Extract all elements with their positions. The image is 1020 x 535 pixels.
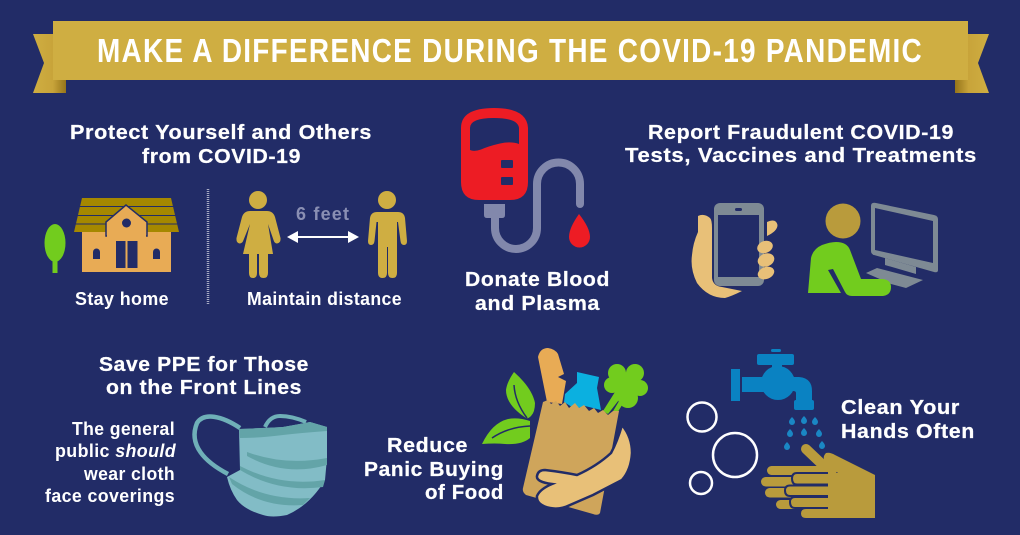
icon: house <box>74 198 179 272</box>
heading: reduce panic buying: Panic Buying <box>364 459 504 481</box>
heading: save ppe: on the Front Lines <box>106 377 302 399</box>
label: 6 feet: 6 feet <box>296 204 349 224</box>
icon: water drops <box>784 416 825 450</box>
text: cloth face coverings: The general <box>72 419 175 439</box>
icon: hand holding phone <box>692 203 778 298</box>
icon: tree <box>44 224 66 273</box>
heading: protect yourself: Protect Yourself and Others <box>70 122 372 144</box>
heading: clean your hands: Hands Often <box>841 421 975 443</box>
icon: washing hands <box>761 449 875 518</box>
heading: reduce panic buying: of Food <box>425 482 504 504</box>
text: cloth face coverings: wear cloth <box>83 464 175 484</box>
heading: protect yourself <box>70 122 372 168</box>
heading: donate blood: and Plasma <box>475 293 600 315</box>
leaf lower <box>482 418 530 444</box>
heading: reduce panic buying <box>364 435 504 504</box>
icon: faucet <box>731 349 814 410</box>
icon: grocery bag <box>482 348 648 515</box>
heading: save ppe <box>99 354 309 399</box>
leaf upper <box>506 372 535 418</box>
icon: person at computer <box>808 204 891 296</box>
arrow: distance <box>287 231 359 243</box>
title banner <box>33 21 989 93</box>
heading: report fraudulent <box>625 122 977 167</box>
heading: donate blood <box>465 269 610 315</box>
heading: report fraudulent: Tests, Vaccines and Treatments <box>625 145 977 167</box>
heading: reduce panic buying: Reduce <box>387 435 468 457</box>
arm <box>537 425 632 509</box>
heading: report fraudulent: Report Fraudulent COVID-19 <box>648 122 954 144</box>
icon: monitor <box>866 203 938 288</box>
icon: blood bag <box>461 108 590 249</box>
label: maintain distance: Maintain distance <box>247 289 402 309</box>
icon: man <box>368 191 407 278</box>
broccoli <box>603 364 648 415</box>
heading: clean your hands <box>841 397 975 443</box>
text: cloth face coverings <box>45 419 177 506</box>
heading: clean your hands: Clean Your <box>841 397 960 419</box>
label: stay home: Stay home <box>75 289 169 309</box>
divider: dotted line <box>207 189 209 305</box>
blue package <box>564 372 601 410</box>
heading: save ppe: Save PPE for Those <box>99 354 309 376</box>
bread <box>538 348 566 404</box>
text: cloth face coverings: face coverings <box>45 486 175 506</box>
bag body <box>523 400 619 515</box>
icon: soap bubbles <box>688 402 757 494</box>
text: cloth face coverings: public should <box>55 441 177 461</box>
heading: donate blood: Donate Blood <box>465 269 610 291</box>
icon: face mask <box>195 416 327 516</box>
icon: woman <box>236 191 281 278</box>
heading: protect yourself: from COVID-19 <box>142 146 301 168</box>
